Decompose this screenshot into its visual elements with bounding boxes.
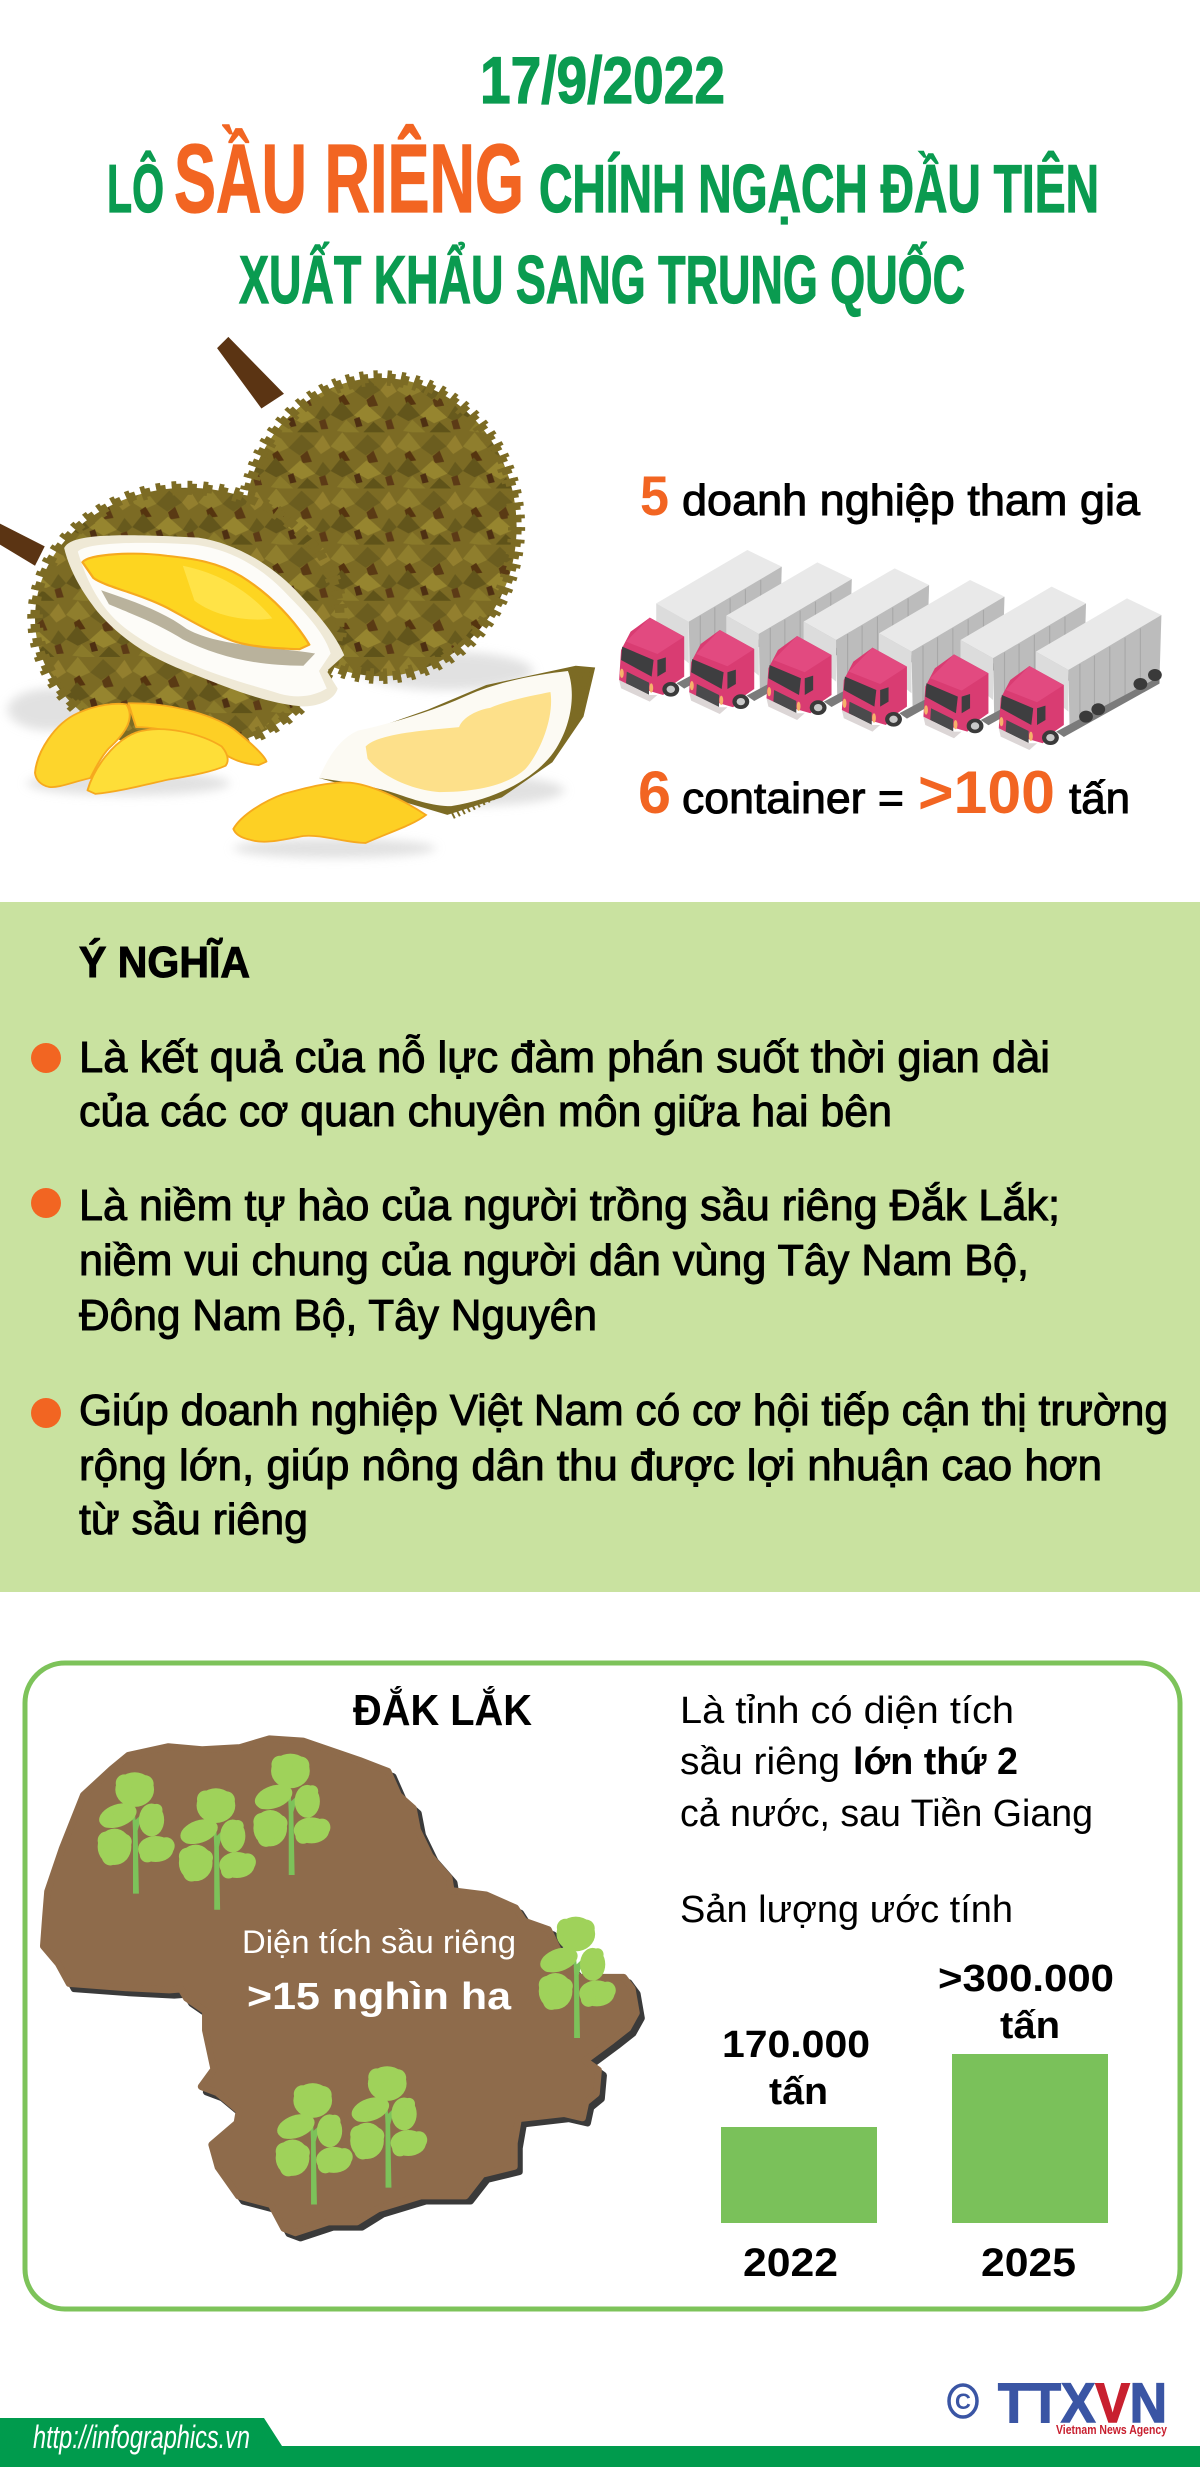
bar 2025: tấn [1000, 2005, 1060, 2047]
durian pod bottom [233, 783, 426, 843]
logo: TTXVN: Vietnam News Agency [1056, 2422, 1168, 2437]
stat: containers and tonnes: tấn [1069, 774, 1130, 823]
bullet 3: rộng lớn, giúp nông dân thu được lợi nhuận cao hơn [79, 1441, 1102, 1490]
bullet 3: Giúp doanh nghiệp Việt Nam có cơ hội tiếp cận thị trường [79, 1386, 1168, 1435]
bullet 2: Đông Nam Bộ, Tây Nguyên [79, 1291, 597, 1340]
footer band [0, 2418, 1200, 2467]
province description: sầu riêng [680, 1741, 840, 1783]
province description: lớn thứ 2 [853, 1741, 1018, 1783]
stat: containers and tonnes: >100 [918, 759, 1055, 826]
stat: containers and tonnes: 6 [638, 759, 671, 826]
title line 2: LÔ [107, 150, 164, 227]
icon: six container trucks [619, 550, 1162, 750]
logo: TTXVN: C [955, 2389, 971, 2414]
durian wedge [319, 666, 595, 815]
province description: cả nước, sau Tiền Giang [680, 1793, 1093, 1835]
map heading: ĐẮK LẮK [353, 1685, 532, 1735]
bullet 3: từ sầu riêng [79, 1495, 308, 1544]
stat: containers and tonnes: container = [682, 774, 904, 823]
panel heading: Ý NGHĨA [79, 937, 250, 987]
map of Dak Lak [43, 1739, 641, 2238]
province description [680, 1690, 1093, 1835]
stat: enterprises: 5 [640, 464, 669, 527]
trees [96, 1754, 616, 2205]
bullet 3 [31, 1386, 1168, 1544]
footer URL: http://infographics.vn [33, 2419, 250, 2455]
chart heading: Sản lượng ước tính [680, 1889, 1013, 1931]
logo: TTXVN: TTXVN [998, 2371, 1167, 2434]
durian pods left [35, 703, 266, 794]
bar 2025: >300.000 [938, 1958, 1114, 2000]
bar 2022 [721, 2024, 877, 2285]
panel: Dak Lak [25, 1663, 1180, 2309]
shadows [8, 652, 564, 858]
date heading: 17/9/2022 [480, 43, 725, 117]
bar 2025: 2025 [981, 2241, 1076, 2285]
map label: area: Diện tích sầu riêng [242, 1924, 516, 1960]
title [107, 43, 1099, 318]
stat: enterprises: doanh nghiệp tham gia [682, 476, 1141, 525]
province description: Là tỉnh có diện tích [680, 1690, 1014, 1732]
map value: area: >15 nghìn ha [247, 1976, 512, 2018]
bullet 1: Là kết quả của nỗ lực đàm phán suốt thời gian dài [79, 1033, 1050, 1082]
title line 2: SẦU RIÊNG [174, 124, 524, 233]
bar 2022: 2022 [743, 2241, 838, 2285]
stat: containers and tonnes [638, 759, 1130, 826]
stat: enterprises [640, 464, 1141, 527]
bar 2022: tấn [769, 2071, 828, 2113]
bar chart: estimated output [721, 1958, 1114, 2285]
big durian [217, 337, 517, 676]
bullet 2 [31, 1181, 1060, 1340]
bullet 1 [31, 1033, 1050, 1136]
bar 2025 [938, 1958, 1114, 2285]
illustration: durians [0, 337, 595, 858]
title line 2 [107, 124, 1099, 233]
bullet 1: của các cơ quan chuyên môn giữa hai bên [79, 1087, 892, 1136]
open durian [0, 488, 344, 749]
bar 2022: 170.000 [722, 2024, 870, 2066]
panel: significance [0, 902, 1200, 1592]
bullet 2: niềm vui chung của người dân vùng Tây Nam Bộ, [79, 1236, 1029, 1285]
bullet 2: Là niềm tự hào của người trồng sầu riêng Đắk Lắk; [79, 1181, 1060, 1230]
